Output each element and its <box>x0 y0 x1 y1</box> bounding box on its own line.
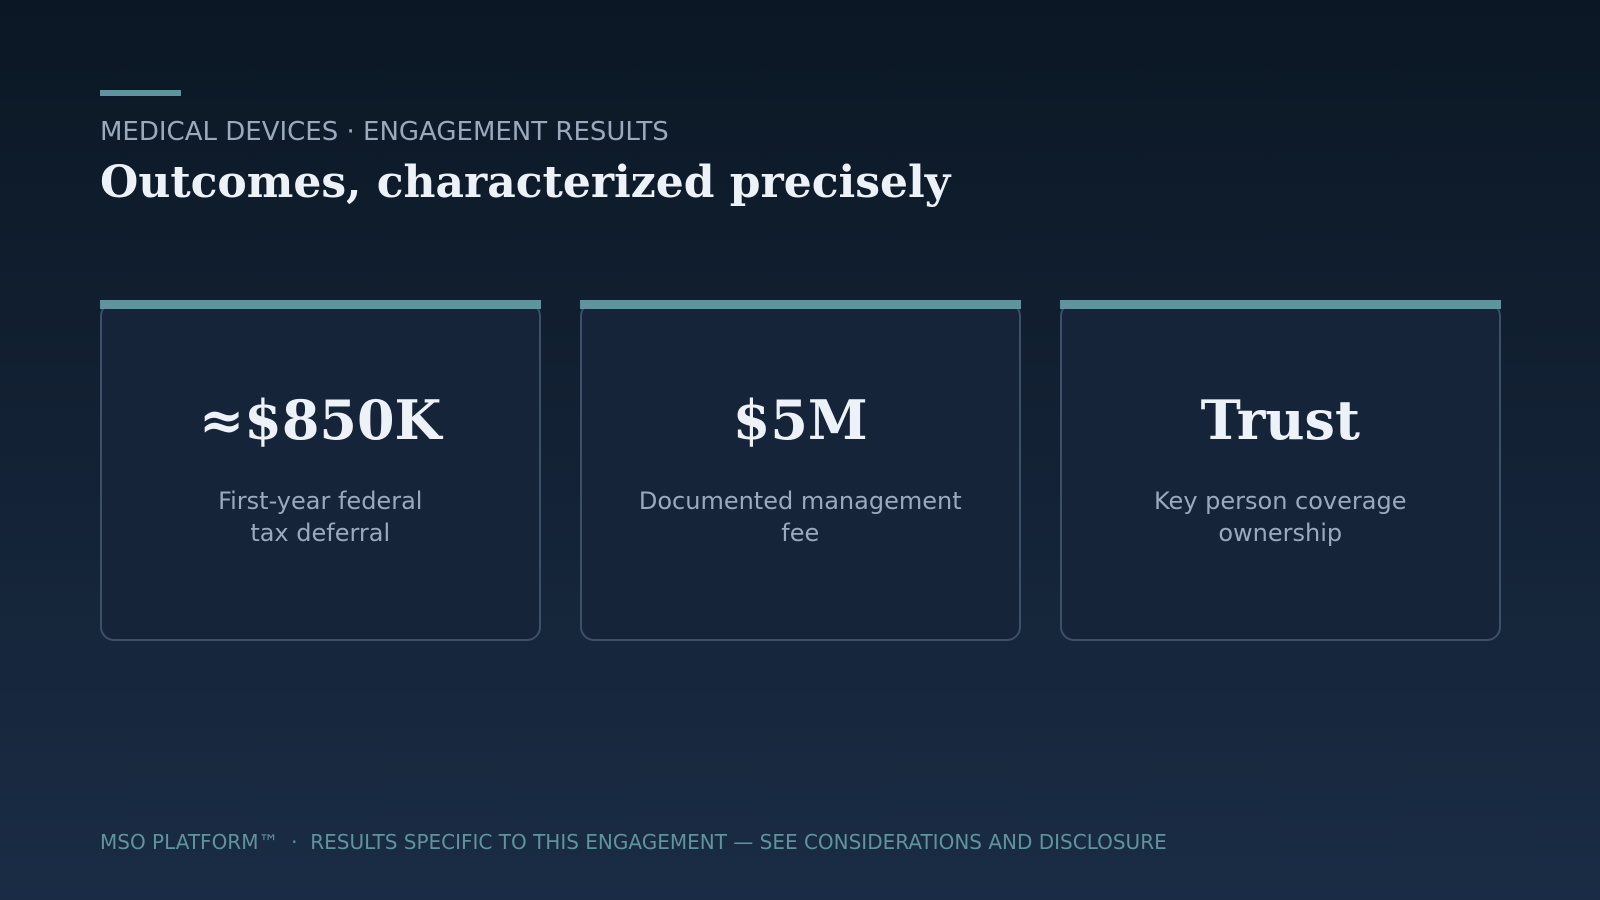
panel: trust <box>1060 300 1501 641</box>
label: tax deferral: tax deferral <box>250 519 390 547</box>
label: management fee <box>639 487 962 547</box>
label: trust <box>1154 487 1406 547</box>
panel: management fee <box>580 300 1021 641</box>
value: management fee: $5M <box>733 388 868 452</box>
label: trust: Key person coverage <box>1154 487 1406 515</box>
label: management fee: Documented management <box>639 487 962 515</box>
label: tax deferral <box>218 487 422 547</box>
value: tax deferral: ≈$850K <box>199 388 441 452</box>
accent bar <box>100 90 181 96</box>
panel: tax deferral <box>100 300 541 641</box>
eyebrow: MEDICAL DEVICES · ENGAGEMENT RESULTS <box>100 117 669 147</box>
label: tax deferral: First-year federal <box>218 487 422 515</box>
value: trust: Trust <box>1201 388 1360 452</box>
title: Outcomes, characterized precisely <box>100 157 950 208</box>
label: trust: ownership <box>1218 519 1342 547</box>
footer: MSO PLATFORM™ · RESULTS SPECIFIC TO THIS ENGAGEMENT — SEE CONSIDERATIONS AND DISCLOSURE <box>100 830 1167 854</box>
label: management fee: fee <box>781 519 819 547</box>
